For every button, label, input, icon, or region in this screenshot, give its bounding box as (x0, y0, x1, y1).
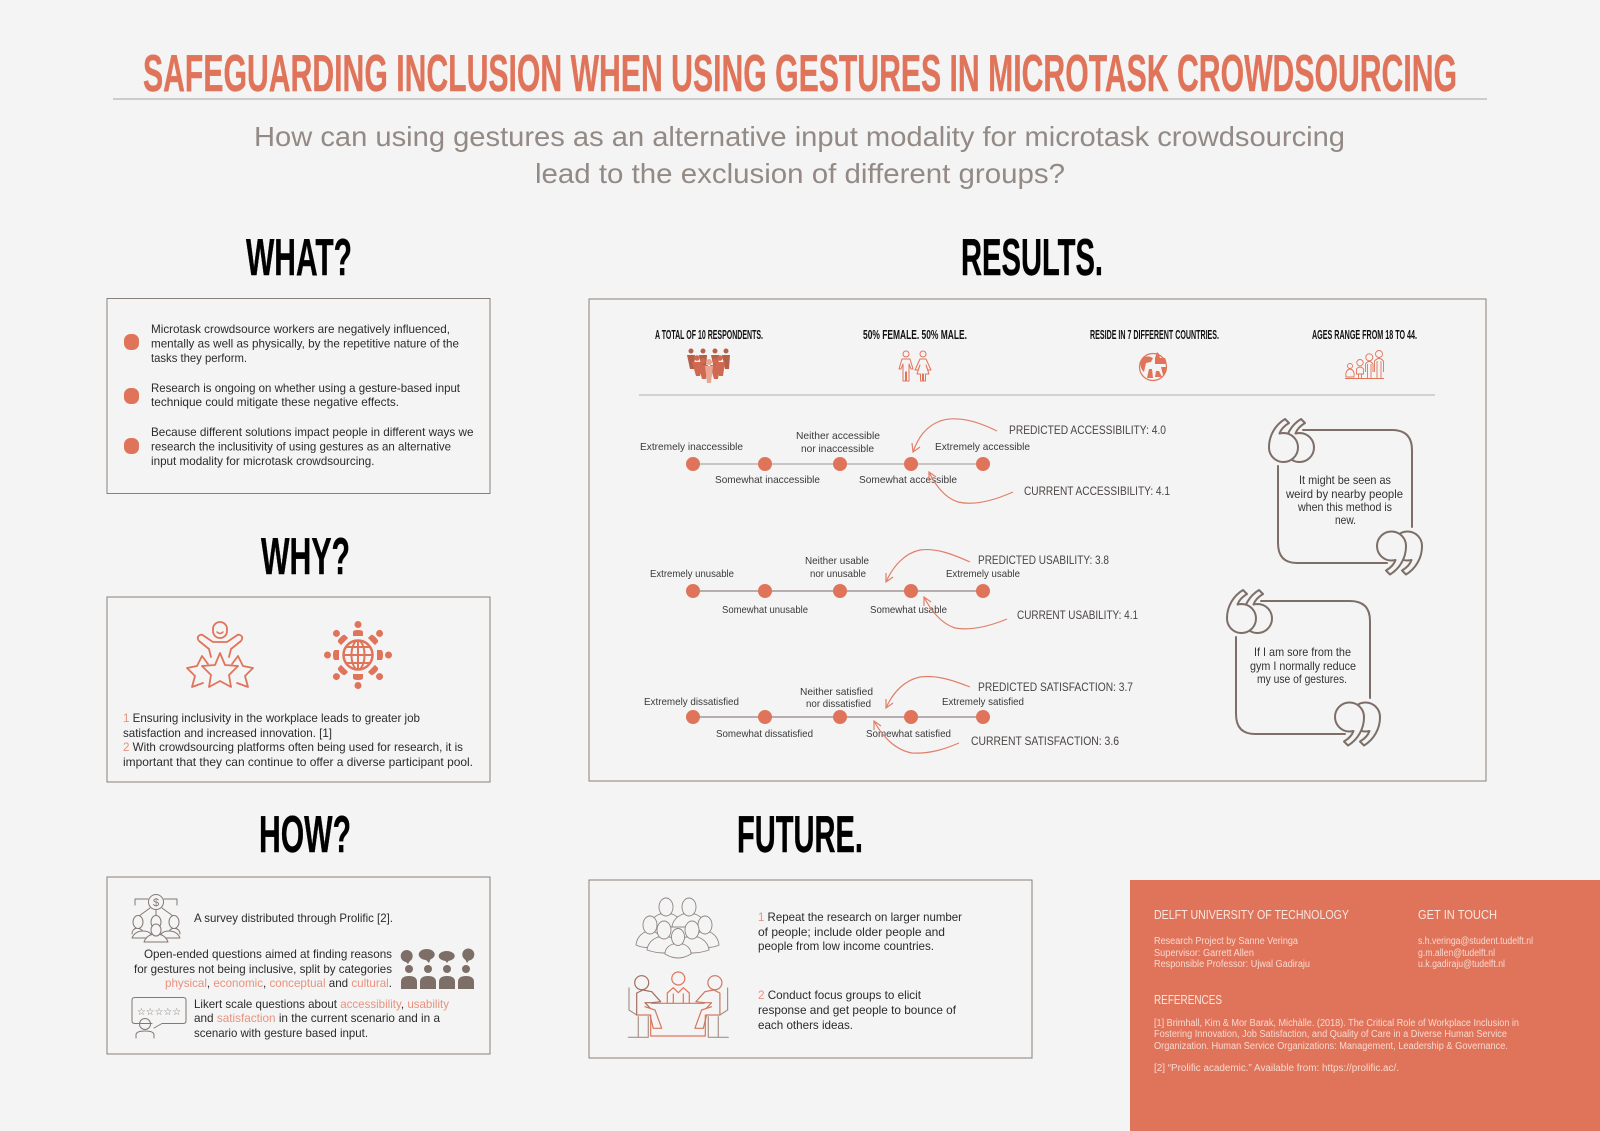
university block: Research Project by Sanne Veringa (1154, 936, 1298, 947)
quote 1: new. (1335, 513, 1356, 527)
arrow: predicted satisfaction (886, 676, 970, 708)
stat: gender: 50% FEMALE. 50% MALE. (863, 328, 967, 342)
chart: usability scale: nor unusable (810, 568, 866, 580)
bullet 2 (124, 381, 461, 409)
quote 2: my use of gestures. (1257, 672, 1347, 686)
bullet 1: mentally as well as physically, by the repetitive nature of the (151, 336, 459, 350)
chart: accessibility scale (640, 419, 1170, 503)
icon: survey crowd with dollar lens: $ (153, 897, 159, 909)
panel: why (107, 597, 490, 782)
text: likert questions: scenario with gesture based input. (194, 1026, 368, 1040)
icon: people with speech bubbles (401, 948, 474, 989)
panel: how (107, 877, 490, 1054)
arrow: current accessibility (929, 472, 1013, 503)
future text: of people; include older people and (758, 925, 945, 939)
chart: satisfaction scale: Somewhat satisfied (866, 728, 951, 740)
text: likert questions (194, 997, 449, 1040)
chart: usability scale: Somewhat unusable (722, 604, 808, 616)
university block: Supervisor: Garrett Allen (1154, 948, 1254, 959)
stat: respondents: A TOTAL OF 10 RESPONDENTS. (655, 328, 763, 342)
why text: 1 Ensuring inclusivity in the workplace leads to greater job (123, 711, 420, 725)
heading: what: WHAT? (246, 229, 352, 287)
quote 2: gym I normally reduce (1250, 659, 1356, 673)
text: open-ended questions: for gestures not being inclusive, split by categories (134, 962, 392, 976)
text: likert questions: Likert scale questions about accessibility, usability (194, 997, 449, 1011)
icon: people of growing age (1345, 350, 1384, 378)
chart: accessibility scale: nor inaccessible (801, 443, 874, 455)
text: open-ended questions (134, 947, 392, 990)
subtitle question (254, 121, 1345, 189)
icon: person on stars (187, 622, 253, 687)
stat: countries: RESIDE IN 7 DIFFERENT COUNTRIES. (1090, 328, 1219, 342)
chart: satisfaction scale: Somewhat dissatisfied (716, 728, 813, 740)
icon: globe with people (324, 621, 392, 689)
future text (758, 910, 962, 1032)
future text: 1 Repeat the research on larger number (758, 910, 962, 924)
icon: review speech bubble: ☆☆☆☆☆ (137, 1007, 181, 1018)
references block: [2] “Prolific academic.” Available from: https://prolific.ac/. (1154, 1063, 1399, 1074)
heading: why: WHY? (261, 528, 350, 586)
subtitle question: How can using gestures as an alternative input modality for microtask crowdsourcing (254, 121, 1345, 152)
future text: response and get people to bounce of (758, 1003, 957, 1017)
text: survey: A survey distributed through Prolific [2]. (194, 911, 393, 925)
subtitle question: lead to the exclusion of different groups? (535, 158, 1065, 189)
contact block (1418, 908, 1533, 970)
text: open-ended questions: Open-ended questions aimed at finding reasons (144, 947, 392, 961)
panel: credits and references (1130, 880, 1600, 1131)
heading: future: FUTURE. (737, 806, 863, 864)
why text: important that they can continue to offer a diverse participant pool. (123, 755, 473, 769)
icon: crowd silhouette (687, 348, 730, 383)
panel: results (589, 299, 1486, 781)
arrow: current usability (924, 597, 1007, 629)
chart: satisfaction scale: PREDICTED SATISFACTION: 3.7 (978, 682, 1133, 694)
chart: satisfaction scale (644, 676, 1133, 753)
future text: people from low income countries. (758, 939, 934, 953)
icon: man and woman (899, 351, 931, 381)
heading: results: RESULTS. (961, 229, 1103, 287)
arrow: predicted accessibility (912, 419, 997, 452)
chart: usability scale: Extremely unusable (650, 568, 734, 580)
why text: satisfaction and increased innovation. [1] (123, 726, 332, 740)
contact block: u.k.gadiraju@tudelft.nl (1418, 959, 1505, 970)
quote 2: If I am sore from the (1254, 645, 1351, 659)
chart: usability scale: Extremely usable (946, 568, 1020, 580)
stat: respondents (655, 328, 763, 383)
icon: world with people (1140, 352, 1166, 380)
heading: how: HOW? (259, 806, 351, 864)
why text: 2 With crowdsourcing platforms often being used for research, it is (123, 740, 463, 754)
chart: accessibility scale: Extremely accessible (935, 441, 1030, 453)
chart: accessibility scale: Somewhat inaccessible (715, 474, 820, 486)
bullet 1: tasks they perform. (151, 351, 247, 365)
why text (123, 711, 473, 769)
chart: usability scale: CURRENT USABILITY: 4.1 (1017, 610, 1138, 622)
quote 1 (1269, 419, 1422, 574)
quote 1: weird by nearby people (1285, 487, 1403, 501)
text: likert questions: and satisfaction in the current scenario and in a (194, 1011, 440, 1025)
references block: Fostering Innovation, Job Satisfaction, and Quality of Care in a Diverse Human Service (1154, 1029, 1507, 1040)
arrow: current satisfaction (874, 721, 959, 753)
future text: each others ideas. (758, 1018, 853, 1032)
quote 1: It might be seen as (1299, 473, 1391, 487)
stat: ages: AGES RANGE FROM 18 TO 44. (1312, 328, 1417, 342)
chart: accessibility scale: PREDICTED ACCESSIBILITY: 4.0 (1009, 425, 1166, 437)
icon: crowd outline (636, 898, 719, 958)
bullet 1: Microtask crowdsource workers are negatively influenced, (151, 322, 450, 336)
quote 1: when this method is (1297, 500, 1392, 514)
contact block: s.h.veringa@student.tudelft.nl (1418, 936, 1533, 947)
bullet 2: technique could mitigate these negative effects. (151, 395, 399, 409)
references block: REFERENCES (1154, 993, 1222, 1007)
stat: gender (863, 328, 967, 381)
references block: Organization. Human Service Organizations: Management, Leadership & Governance. (1154, 1041, 1508, 1052)
chart: satisfaction scale: Extremely satisfied (942, 696, 1024, 708)
arrow: predicted usability (886, 550, 970, 582)
icon: focus group at table (628, 972, 728, 1037)
chart: satisfaction scale: Neither satisfied (800, 686, 873, 698)
references block (1154, 993, 1519, 1074)
university block (1154, 908, 1350, 970)
chart: accessibility scale: Somewhat accessible (859, 474, 957, 486)
university block: DELFT UNIVERSITY OF TECHNOLOGY (1154, 908, 1350, 922)
future text: 2 Conduct focus groups to elicit (758, 988, 922, 1002)
bullet 3: input modality for microtask crowdsourcing. (151, 454, 374, 468)
chart: accessibility scale: Neither accessible (796, 430, 880, 442)
contact block: GET IN TOUCH (1418, 908, 1497, 922)
chart: accessibility scale: Extremely inaccessible (640, 441, 743, 453)
university block: Responsible Professor: Ujwal Gadiraju (1154, 959, 1310, 970)
chart: accessibility scale: CURRENT ACCESSIBILITY: 4.1 (1024, 486, 1170, 498)
bullet 1 (124, 322, 459, 365)
chart: satisfaction scale: CURRENT SATISFACTION: 3.6 (971, 736, 1119, 748)
bullet 2: Research is ongoing on whether using a gesture-based input (151, 381, 461, 395)
chart: usability scale: Somewhat usable (870, 604, 947, 616)
panel: future (589, 880, 1032, 1058)
contact block: g.m.allen@tudelft.nl (1418, 948, 1495, 959)
chart: usability scale: PREDICTED USABILITY: 3.8 (978, 555, 1109, 567)
panel: what (107, 298, 490, 494)
icon: review speech bubble (132, 998, 186, 1038)
chart: satisfaction scale: Extremely dissatisfied (644, 696, 739, 708)
stat: ages (1312, 328, 1417, 378)
chart: satisfaction scale: nor dissatisfied (806, 698, 871, 710)
quote 2 (1227, 590, 1380, 746)
references block: [1] Brimhall, Kim & Mor Barak, Michàlle. (2018). The Critical Role of Workplace Inclusion in (1154, 1018, 1519, 1029)
icon: survey crowd with dollar lens (132, 894, 180, 942)
chart: usability scale (650, 550, 1138, 629)
bullet 3: Because different solutions impact people in different ways we (151, 425, 474, 439)
bullet 3 (124, 425, 474, 468)
chart: usability scale: Neither usable (805, 555, 869, 567)
bullet 3: research the inclusitivity of using gestures as an alternative (151, 440, 451, 454)
stat: countries (1090, 328, 1219, 380)
text: open-ended questions: physical, economic, conceptual and cultural. (165, 976, 392, 990)
